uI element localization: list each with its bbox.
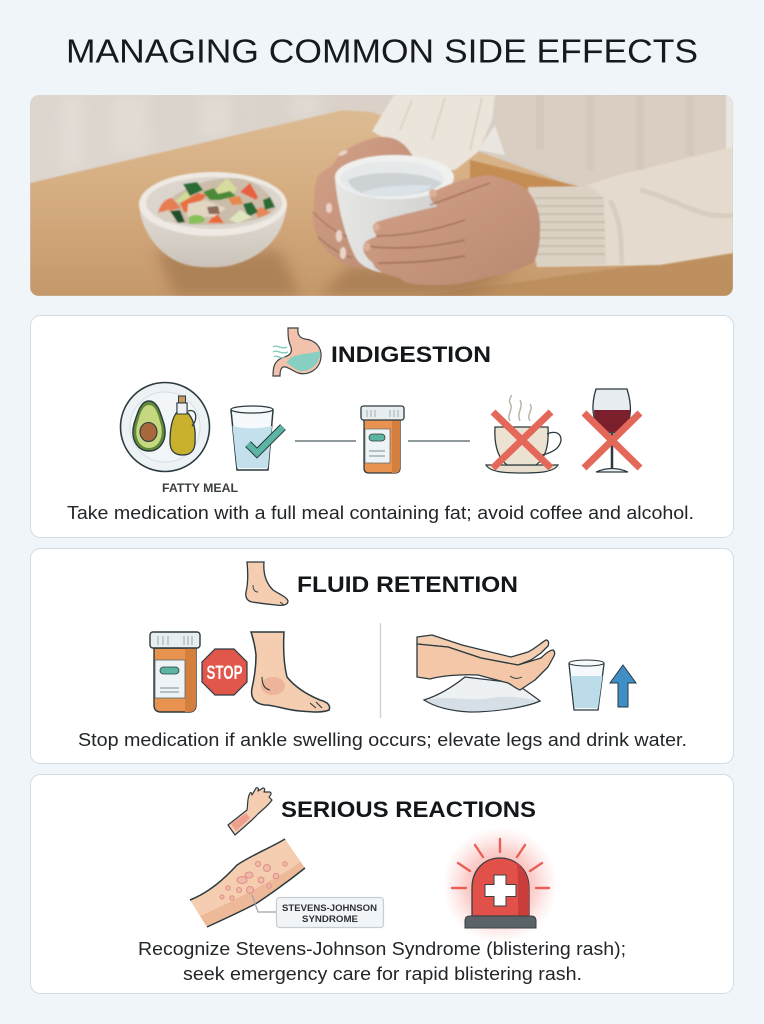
label: fatty meal: FATTY MEAL xyxy=(162,483,238,495)
icon: swollen ankle foot xyxy=(251,632,330,712)
hand left behind cup xyxy=(313,137,420,268)
hand right over cup xyxy=(363,175,540,285)
right sleeve xyxy=(528,147,733,267)
icon: elevated legs on pillow xyxy=(417,635,555,712)
icon: up arrow xyxy=(610,665,636,707)
panel: fluid retention xyxy=(30,548,734,764)
illustration: arm with blistering rash xyxy=(190,839,305,927)
icon: medicine bottle xyxy=(150,632,200,712)
panel: indigestion xyxy=(30,316,734,538)
divider xyxy=(380,623,382,718)
icon: emergency siren xyxy=(442,827,558,943)
icon: wine crossed out xyxy=(584,389,640,472)
arrow line: meal to medicine xyxy=(295,440,356,442)
icon: medicine bottle xyxy=(361,406,404,473)
soft shadows xyxy=(155,250,520,296)
instruction text: Stop medication if ankle swelling occurs; elevate legs and drink water. xyxy=(78,730,687,750)
icon: stomach xyxy=(273,328,321,376)
instruction text: Recognize Stevens-Johnson Syndrome (blistering rash); xyxy=(138,939,626,959)
icon: fatty meal plate xyxy=(120,382,210,472)
heading: indigestion: INDIGESTION xyxy=(331,342,491,367)
oil bottle xyxy=(170,396,196,455)
icon: glass of water with check xyxy=(231,406,283,470)
callout: stevens-johnson syndrome: SYNDROME xyxy=(302,914,358,925)
callout: stevens-johnson syndrome: STEVENS-JOHNSON xyxy=(282,903,377,914)
callout: stevens-johnson syndrome xyxy=(252,895,384,928)
avocado xyxy=(133,401,165,451)
icon: coffee crossed out xyxy=(486,395,561,473)
left sleeve xyxy=(372,95,495,170)
heading: serious reactions: SERIOUS REACTIONS xyxy=(281,797,536,822)
sweater body xyxy=(647,96,726,166)
instruction text: seek emergency care for rapid blistering rash. xyxy=(183,964,582,984)
instruction text xyxy=(138,939,626,984)
white cup xyxy=(335,178,454,273)
icon: hand with rash xyxy=(228,788,272,835)
panel: serious reactions xyxy=(30,774,734,994)
icon: stop sign: STOP xyxy=(206,663,243,684)
icon: stop sign xyxy=(202,649,247,695)
arrow line: medicine to avoid xyxy=(408,440,470,442)
icon: small foot xyxy=(246,562,288,605)
photo: hands holding cup of water beside a salad bowl xyxy=(30,95,733,296)
salad bowl xyxy=(139,204,287,267)
instruction text: Take medication with a full meal containing fat; avoid coffee and alcohol. xyxy=(67,503,694,523)
title: MANAGING COMMON SIDE EFFECTS xyxy=(66,34,698,70)
heading: fluid retention: FLUID RETENTION xyxy=(297,572,518,597)
icon: glass of water xyxy=(569,660,604,710)
